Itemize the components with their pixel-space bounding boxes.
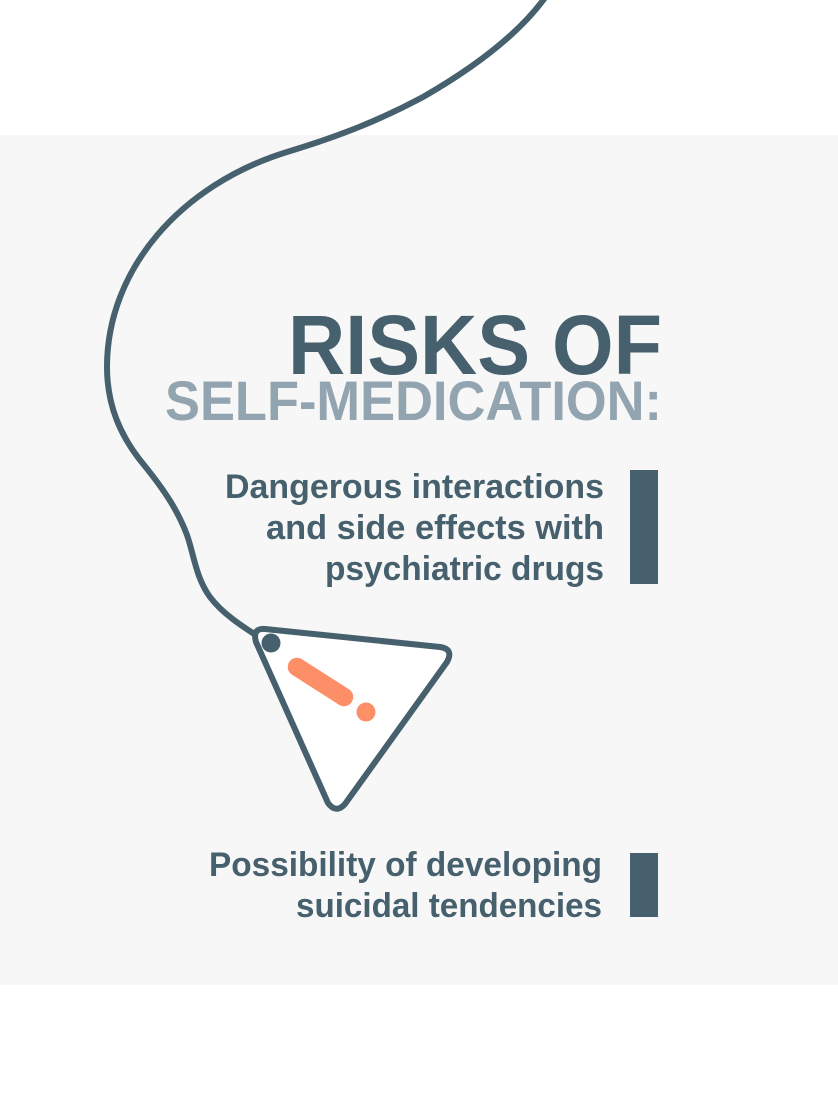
risk item 1 text: Dangerous interactions [225, 468, 604, 506]
tag string [107, 0, 549, 639]
risk item 1 text: and side effects with [266, 509, 604, 547]
icon: warning tag with string [107, 0, 549, 809]
exclamation bar [297, 667, 344, 697]
background panel [0, 135, 838, 985]
risk item 1 text [225, 468, 604, 588]
title line 1: RISKS OF [288, 298, 662, 392]
risk item 1 bar [630, 470, 658, 584]
title [165, 298, 662, 432]
risk item 2 text: Possibility of developing [209, 846, 602, 884]
risk item 2 text: suicidal tendencies [296, 887, 602, 925]
risk item 2 bar [630, 853, 658, 917]
tag triangle [255, 629, 449, 809]
exclamation dot [356, 702, 376, 722]
tag hole [262, 634, 280, 652]
risk item 2 text [209, 846, 602, 925]
title line 2: SELF-MEDICATION: [165, 370, 662, 432]
risk item 1 text: psychiatric drugs [325, 550, 604, 588]
